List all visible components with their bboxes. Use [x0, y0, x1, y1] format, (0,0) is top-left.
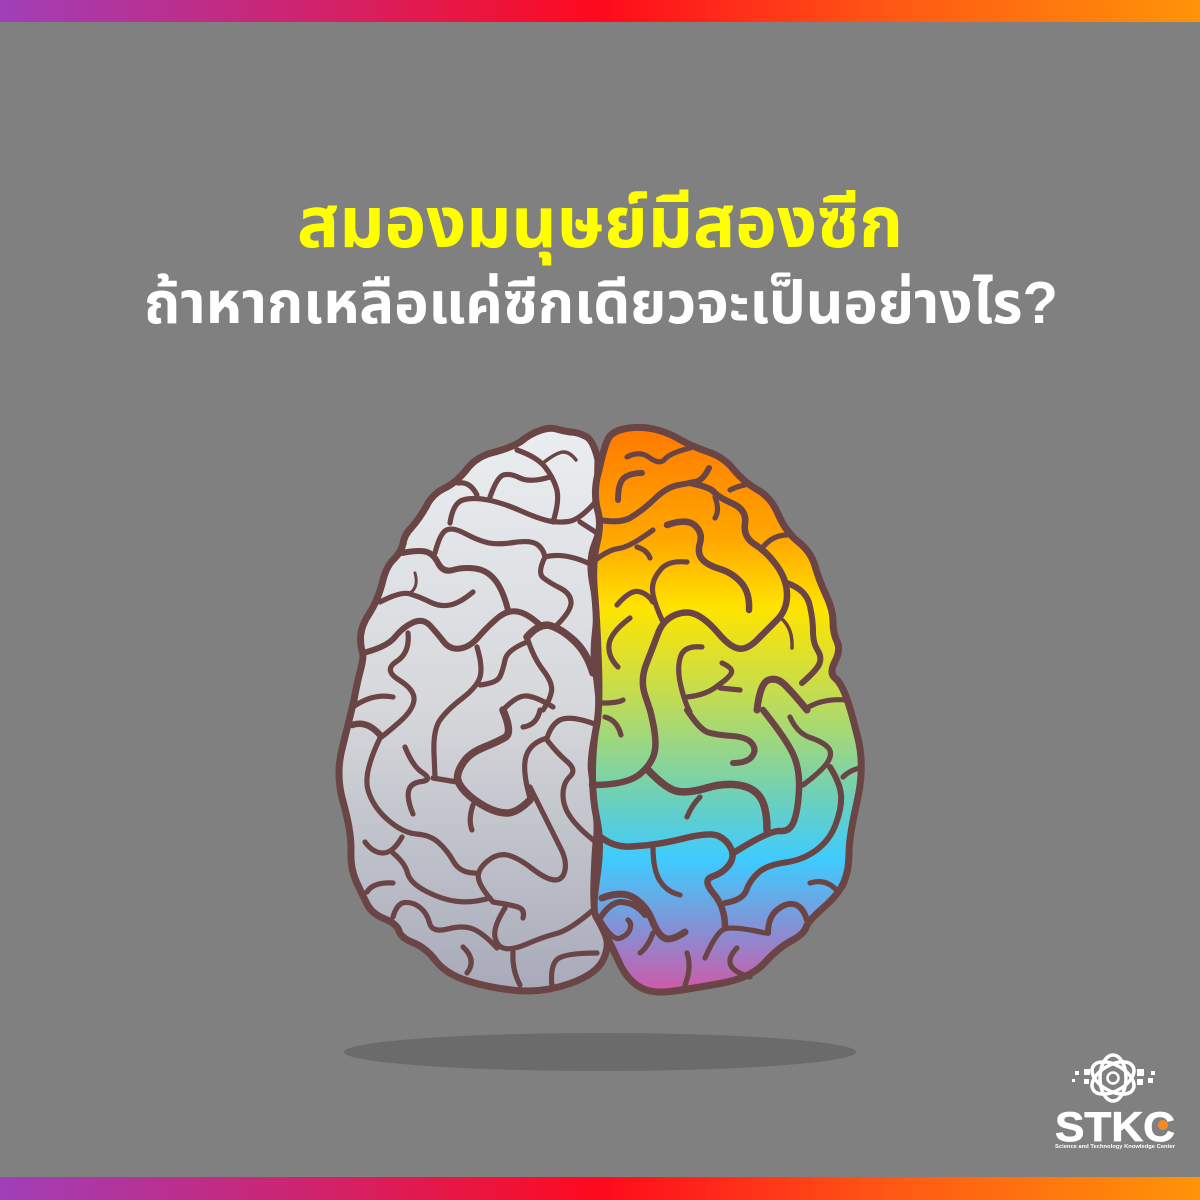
brain shadow [344, 1033, 856, 1071]
title line 1: สมองมนุษย์มีสองซีก [297, 184, 903, 266]
title line 2: ถ้าหากเหลือแค่ซีกเดียวจะเป็นอย่างไร? [144, 270, 1058, 336]
right hemisphere (rainbow) [592, 427, 861, 992]
top gradient bar [0, 0, 1200, 22]
bottom gradient bar [0, 1177, 1200, 1200]
logo orange dot [1158, 1120, 1168, 1130]
logo wordmark: STKC [1055, 1103, 1175, 1150]
logo tagline: Science and Technology Knowledge Center [1055, 1144, 1176, 1150]
right hemisphere outline [592, 427, 861, 992]
left hemisphere (grey) [339, 428, 607, 991]
brain illustration [339, 427, 861, 992]
icon: pixel squares [1072, 1069, 1155, 1085]
STKC logo [1055, 1055, 1176, 1150]
left hemisphere outline [339, 428, 607, 991]
icon: atom emblem [1087, 1055, 1139, 1101]
